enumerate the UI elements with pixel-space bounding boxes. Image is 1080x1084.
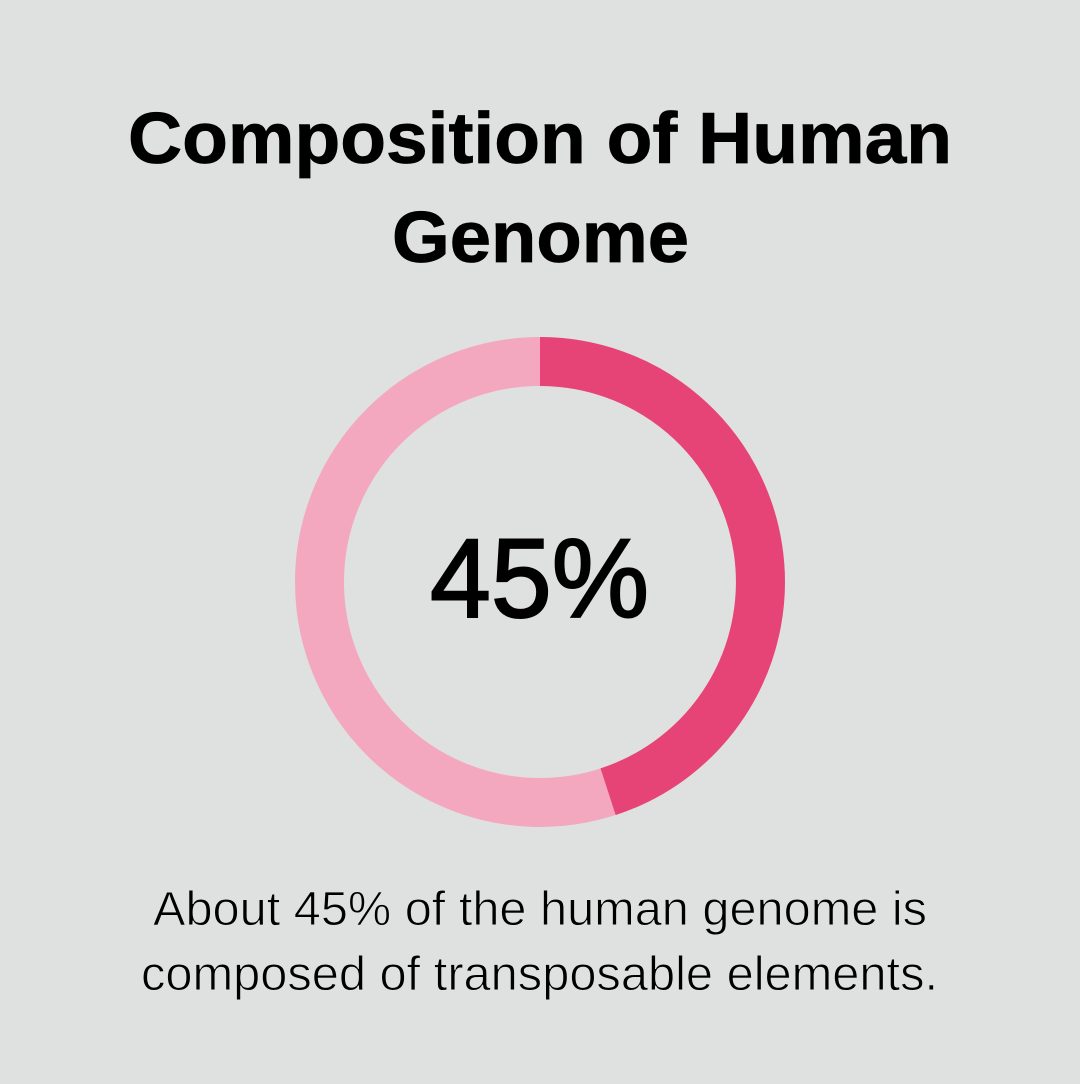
donut highlighted segment xyxy=(540,362,760,792)
description text: About 45% of the human genome is xyxy=(153,883,927,936)
donut chart: 45% xyxy=(320,362,760,802)
donut remainder segment xyxy=(320,362,760,802)
title xyxy=(128,99,952,278)
description text xyxy=(141,883,938,1001)
center percentage: 45% xyxy=(430,516,649,641)
title: Genome xyxy=(392,198,689,278)
title: Composition of Human xyxy=(128,99,952,179)
description text: composed of transposable elements. xyxy=(141,948,938,1001)
